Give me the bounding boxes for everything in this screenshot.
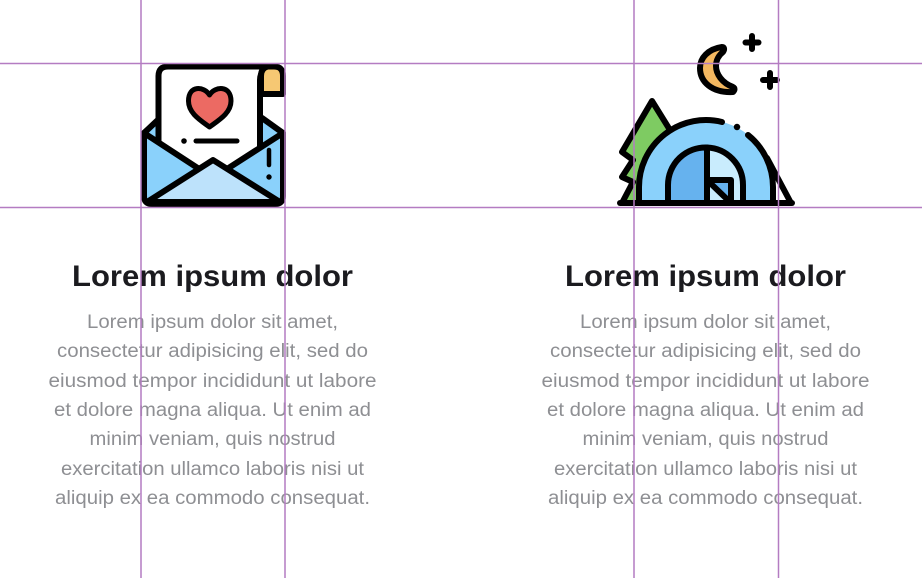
body text: left column: eiusmod tempor incididunt ut labore — [48, 371, 376, 392]
heading: left column: Lorem ipsum dolor — [72, 260, 353, 293]
body text: right column: aliquip ex ea commodo consequat. — [548, 488, 863, 509]
icon: tent under moon — [620, 36, 792, 203]
body text: left column: et dolore magna aliqua. Ut enim ad — [54, 400, 371, 421]
body text: right column: consectetur adipisicing elit, sed do — [550, 341, 861, 362]
body text: right column — [542, 312, 870, 509]
body text: left column: aliquip ex ea commodo consequat. — [55, 488, 370, 509]
body text: right column: minim veniam, quis nostrud — [582, 429, 828, 450]
body text: right column: eiusmod tempor incididunt ut labore — [542, 371, 870, 392]
body text: right column: et dolore magna aliqua. Ut enim ad — [547, 400, 864, 421]
heading: right column: Lorem ipsum dolor — [565, 260, 846, 293]
body text: left column: consectetur adipisicing elit, sed do — [57, 341, 368, 362]
text block: right column — [542, 260, 870, 509]
body text: left column: Lorem ipsum dolor sit amet, — [87, 312, 338, 333]
text block: left column — [48, 260, 376, 509]
icon: love letter envelope — [144, 66, 283, 204]
body text: right column: Lorem ipsum dolor sit amet, — [580, 312, 831, 333]
body text: left column: minim veniam, quis nostrud — [90, 429, 336, 450]
body text: left column — [48, 312, 376, 509]
body text: left column: exercitation ullamco laboris nisi ut — [61, 459, 365, 480]
body text: right column: exercitation ullamco laboris nisi ut — [554, 459, 858, 480]
